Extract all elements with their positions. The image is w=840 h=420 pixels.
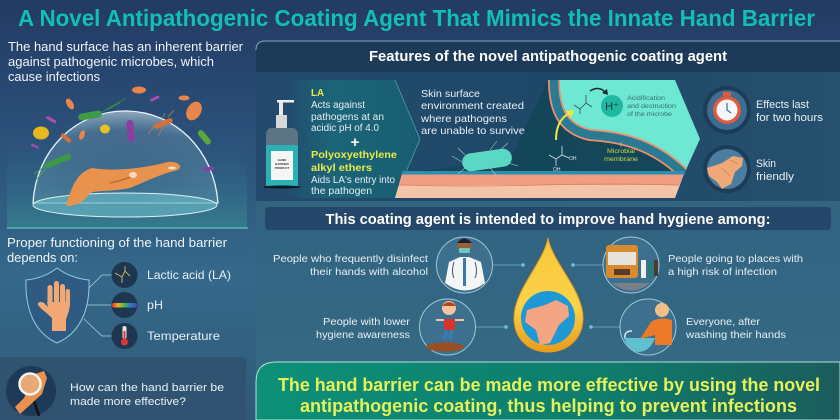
text: barrier intro: cause infections [8,70,100,84]
labels: dependencies: Temperature [147,329,220,343]
panel: conclusion [256,362,840,420]
icon: product bottle: PRODUCT [275,166,290,170]
text: acidification [627,96,676,118]
icon: magnifier over hand [6,366,56,416]
text: question: made more effective? [70,396,186,408]
text: conclusion: antipathogenic coating, thus helping to prevent infections [300,396,797,416]
text: barrier intro: The hand surface has an inherent barrier [8,40,243,54]
text: frequent disinfectors [273,253,428,278]
text: LA: acidic pH of 4.0 [311,123,379,134]
text: microbial membrane [604,142,639,163]
illustration: skin and microbe membrane: OH [569,156,577,162]
text: skin friendly [756,158,795,183]
text: polyoxyethylene alkyl ethers: Aids LA's entry into [311,175,395,186]
icon: child in mud [420,299,476,355]
text: skin surface environment [420,88,525,137]
text: LA: pathogens at an [311,112,384,123]
panel: coating agent container [256,41,840,420]
icon: doctor [436,237,492,293]
text: high-risk places: People going to places with [668,253,803,265]
text: acidification: of the microbe [627,112,673,118]
connectors [84,275,112,336]
icon: drop with washing hands [514,238,583,352]
title: A Novel Antipathogenic Coating Agent That Mimics the Innate Hand Barrier [18,5,815,31]
text: question: How can the hand barrier be [70,382,224,394]
text: conclusion: The hand barrier can be made more effective by using the novel [278,375,820,395]
text: polyoxyethylene alkyl ethers [311,149,397,197]
text: barrier intro: against pathogenic microbes, which [8,55,214,69]
text: lower hygiene awareness [316,316,411,341]
text: question [70,382,224,408]
skin layers [395,174,684,198]
text: polyoxyethylene alkyl ethers: alkyl ethers [311,162,372,174]
text: microbial membrane: membrane [604,157,639,163]
icon: H+: H⁺ [605,101,619,113]
panel: hand barrier dependencies [7,236,231,349]
heading: target groups [265,207,831,230]
icon: thermometer [112,323,138,349]
text: effects last: Effects last [756,99,809,111]
text: dependency heading [7,236,227,265]
text: frequent disinfectors: People who frequently disinfect [273,253,428,265]
text: lower hygiene awareness: People with lower [323,316,411,328]
text: high-risk places [668,253,803,278]
text: effects last [756,99,824,124]
panel: hand surface barrier [7,40,248,229]
text: LA: LA [311,87,324,99]
microbial membrane [554,80,683,173]
illustration: skin and microbe membrane [395,80,700,198]
text: frequent disinfectors: their hands with alcohol [310,266,428,278]
plus sign: + [351,134,360,151]
microbes [31,86,214,180]
text: dependency heading: depends on: [7,251,78,265]
pathogen [452,141,518,176]
text: skin surface environment: are unable to survive [421,125,525,137]
icon: bus and passengers [603,237,659,293]
icon: product bottle: HAND [278,158,287,162]
text: everyone: washing their hands [685,329,786,341]
heading: target groups: This coating agent is intended to improve hand hygiene among: [326,212,770,228]
text: LA: Acts against [311,100,365,111]
icon: stopwatch [703,86,751,134]
panel: question card [0,357,246,420]
text: everyone [685,316,786,341]
lactate molecule inside [574,95,592,114]
text: skin friendly: Skin [756,158,776,170]
text: LA [311,87,384,134]
text: conclusion [278,375,820,416]
connectors [475,264,620,328]
lactic acid molecule outside [549,146,569,166]
text: everyone: Everyone, after [686,316,761,328]
text: polyoxyethylene alkyl ethers: the pathogen [311,186,372,197]
labels: dependencies: pH [147,298,163,312]
text: high-risk places: a high risk of infection [668,266,777,278]
text: barrier intro [8,40,243,84]
arrow: proton release [590,89,606,93]
text: microbial membrane: Microbial [607,149,635,155]
text: acidification: Acidification [627,96,665,102]
icon: product bottle: BARRIER [275,162,290,166]
dark microbe interior wedge [402,80,684,172]
text: lower hygiene awareness: hygiene awareness [316,329,410,341]
arrow: entry into microbe [556,112,572,140]
icon: pH rainbow [112,292,138,318]
text: effects last: for two hours [756,112,824,124]
text: skin surface environment: Skin surface [421,88,480,100]
icon: skin friendly hands [703,145,751,193]
text: dependency heading: Proper functioning of the hand barrier [7,236,227,250]
text: skin surface environment: environment created [421,100,524,112]
icon: woman washing hands [620,299,676,355]
icon: shield with hand [26,268,89,343]
text: acidification: and destruction [627,104,676,110]
icon: product bottle [263,100,301,188]
labels: dependencies [147,268,231,343]
text: polyoxyethylene alkyl ethers: Polyoxyethylene [311,149,397,161]
text: skin friendly: friendly [756,171,795,183]
icon: H+ [601,95,623,117]
labels: dependencies: Lactic acid (LA) [147,268,231,282]
aqua microbe body [555,80,700,174]
illustration: skin and microbe membrane: OH [553,167,561,173]
panel: ingredients chevron [263,80,420,198]
text: skin surface environment: where pathogens [420,113,507,125]
illustration: hand under dome with microbes [31,86,218,217]
icon: lactic acid [112,262,138,288]
heading: features: Features of the novel antipathogenic coating agent [369,49,727,65]
